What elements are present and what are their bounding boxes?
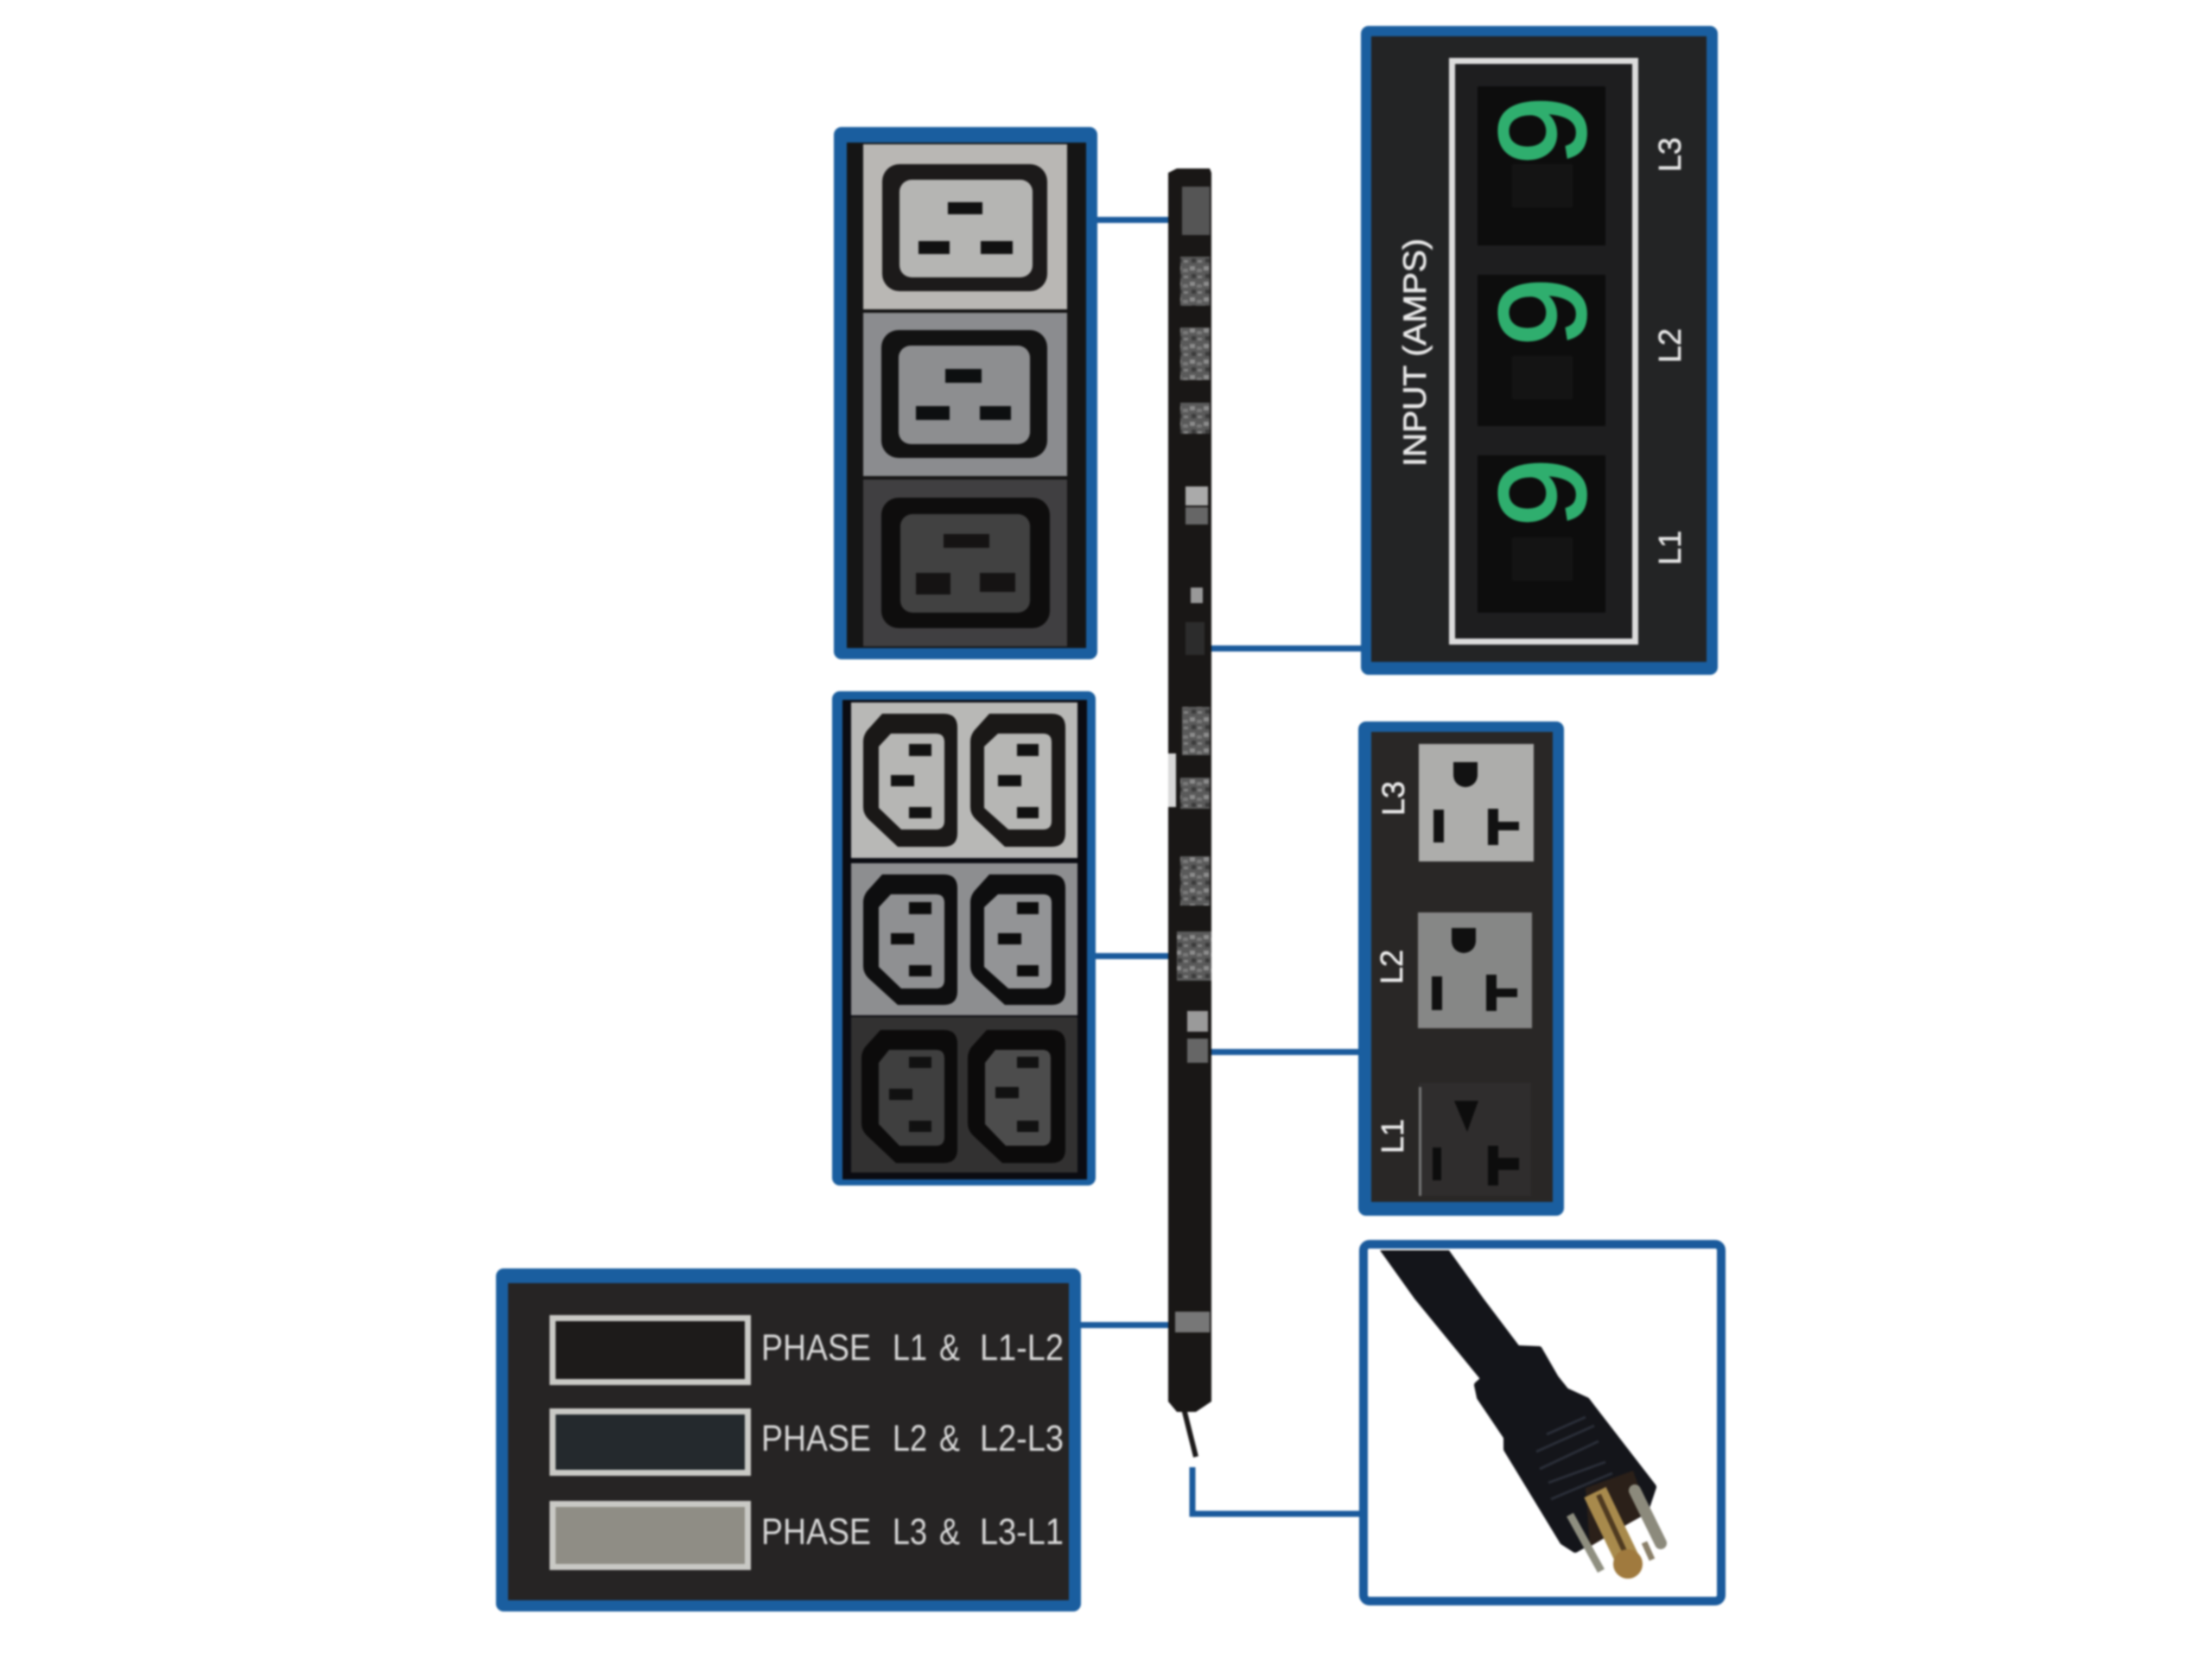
legend label: L3: L3-L1 [980,1511,1064,1553]
C13 outlet left [861,1030,957,1163]
legend swatch: L1 [553,1319,748,1382]
connector: input meter panel to strip [1197,645,1363,652]
panel: C19 outlets [834,127,1097,659]
legend swatch: L2 [553,1412,748,1472]
panel frame [832,691,1096,1185]
connector: C19 panel to strip [1096,217,1173,223]
prong: silver lower [1644,1542,1652,1560]
label: L1: L1 [1375,1119,1410,1154]
legend label: L1: L1 [893,1327,927,1369]
C19 outlet: L1 dark plate [863,480,1067,646]
panel frame [1358,721,1564,1216]
strip power cord stub [1182,1402,1196,1457]
plate row: L2 mid [851,863,1077,1015]
label: L1: L1 [1652,531,1688,565]
label: L3: L3 [1652,137,1688,172]
legend swatch: L3 [553,1503,748,1567]
C13 outlet right [968,1030,1065,1163]
plug face [1586,1471,1648,1547]
label: L2: L2 [1374,950,1409,984]
legend label: L3: PHASE [761,1511,871,1553]
prong: silver right [1635,1491,1661,1543]
legend label: L3: & [939,1511,960,1553]
icon: power cord and L6 plug [1380,1250,1661,1579]
panel: phase legend [496,1268,1081,1611]
prong: silver left [1570,1515,1601,1571]
plug body [1478,1349,1653,1549]
C13 outlet right [970,874,1065,1005]
legend label: L2: & [939,1418,960,1459]
panel: input plug [1363,1244,1721,1601]
meter display: L1: 9 [1474,459,1611,526]
legend label: L2: L2 [893,1418,927,1459]
panel: 5-20R outlets [1358,721,1564,1216]
outlet: L3 light [1419,744,1534,861]
connector: plug panel to strip [1192,1467,1362,1514]
panel: C13 outlets [832,691,1096,1185]
connector: legend panel to strip [1079,1322,1173,1328]
panel frame [496,1268,1081,1611]
C19 outlet: L2 mid plate [863,313,1067,476]
strip outlet segments [1168,187,1211,1332]
prong: gold center [1595,1492,1629,1562]
strip body [1168,168,1211,1412]
legend label: L1: PHASE [761,1327,871,1369]
panel frame [1363,1244,1721,1601]
prong: gold center highlight [1599,1495,1624,1551]
meter display: L1 [1474,455,1611,613]
prong: gold tip [1613,1549,1643,1579]
meter frame [1452,60,1635,641]
connector: 5-20R panel to strip [1197,1049,1361,1055]
label: L3: L3 [1376,781,1411,816]
plug ridges [1536,1417,1612,1499]
panel: input amps meters [1361,26,1718,675]
legend label: L2: L2-L3 [980,1418,1064,1459]
legend label: L1: L1-L2 [980,1327,1064,1369]
label: L2: L2 [1652,328,1688,363]
outlet: L2 mid [1418,912,1532,1028]
C19 outlet: L3 light plate [863,144,1067,309]
outlet: L1 dark [1419,1083,1531,1196]
legend label: L3: L3 [893,1511,927,1553]
panel frame [834,127,1097,659]
meter display: L2: 9 [1474,278,1611,346]
meter display: L3: 9 [1474,97,1611,164]
C13 outlet right [970,714,1065,847]
panel frame [1361,26,1718,675]
legend label: L1: & [939,1327,960,1369]
cable [1380,1250,1521,1379]
plate row: L3 light [851,702,1077,858]
label: INPUT (AMPS): INPUT (AMPS) [1397,238,1433,467]
legend label: L2: PHASE [761,1418,871,1459]
meter display: L2 [1474,275,1611,426]
C13 outlet left [863,874,957,1005]
connector: C13 panel to strip [1094,953,1173,959]
meter display: L3 [1474,86,1611,245]
PDU strip [1168,168,1211,1457]
C13 outlet left [863,714,957,847]
plate row: L1 dark [851,1017,1077,1173]
